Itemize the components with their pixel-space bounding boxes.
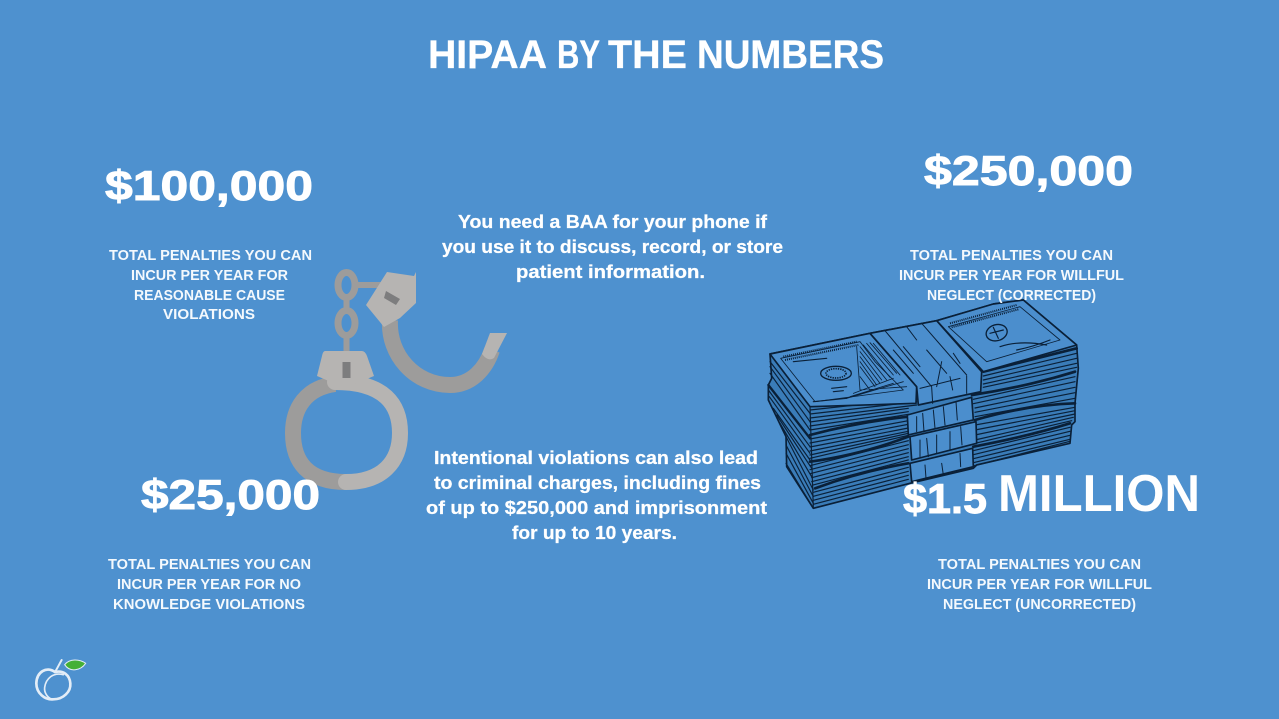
text block: BAA note: [442, 212, 783, 282]
lower bands: [907, 397, 973, 435]
top notes: [770, 333, 917, 407]
stat: $100,000: REASONABLE CAUSE: [134, 288, 285, 304]
stat: $1.5 million: MILLION: [998, 465, 1200, 523]
stat: $100,000: INCUR PER YEAR FOR: [131, 268, 289, 284]
text block: BAA note: patient information.: [516, 262, 705, 282]
stat: $250,000: INCUR PER YEAR FOR WILLFUL: [899, 268, 1124, 284]
stat: $250,000: TOTAL PENALTIES YOU CAN: [910, 248, 1113, 264]
stat: $100,000: [105, 162, 313, 323]
stat: $100,000: $100,000: [105, 162, 313, 209]
stat: $1.5 million: INCUR PER YEAR FOR WILLFUL: [927, 577, 1152, 593]
silhouette: [768, 300, 1078, 508]
title: NUMBERS: [697, 33, 884, 77]
stat: $25,000: $25,000: [141, 471, 320, 518]
title: THE: [608, 33, 687, 77]
stat: $25,000: INCUR PER YEAR FOR NO: [117, 577, 301, 593]
stat: $1.5 million: NEGLECT (UNCORRECTED): [943, 597, 1136, 613]
icon: stack of cash: [768, 300, 1078, 508]
open cuff tip: [482, 333, 507, 359]
stat: $1.5 million: TOTAL PENALTIES YOU CAN: [938, 557, 1141, 573]
icon: peach logo: [36, 660, 86, 699]
title: BY: [557, 33, 600, 77]
stat: $25,000: TOTAL PENALTIES YOU CAN: [108, 557, 311, 573]
stat: $250,000: $250,000: [924, 147, 1133, 194]
left corner edges: [768, 362, 813, 508]
open cuff arc: [390, 320, 492, 385]
title: [428, 33, 884, 77]
stat: $100,000: TOTAL PENALTIES YOU CAN: [109, 248, 312, 264]
left face page edges: [810, 398, 917, 504]
stat: $250,000: NEGLECT (CORRECTED): [927, 288, 1096, 304]
stat: $25,000: [108, 471, 320, 613]
stat: $25,000: KNOWLEDGE VIOLATIONS: [113, 597, 305, 613]
open cuff lock: [366, 272, 416, 327]
text block: criminal charges note: Intentional violations can also lead: [434, 448, 758, 468]
text block: BAA note: You need a BAA for your phone if: [458, 212, 768, 232]
stat: $250,000: [899, 147, 1133, 304]
text block: BAA note: you use it to discuss, record, or store: [442, 237, 783, 257]
text block: criminal charges note: [426, 448, 767, 543]
centre band: [870, 321, 982, 405]
chain links: [338, 272, 382, 352]
text block: criminal charges note: of up to $250,000 and imprisonment: [426, 498, 767, 518]
right face page edges: [973, 353, 1077, 466]
stat: $1.5 million: [903, 465, 1200, 613]
stat: $1.5 million: $1.5: [903, 475, 987, 522]
text block: criminal charges note: for up to 10 years.: [512, 523, 677, 543]
lower cuff ring: [293, 382, 400, 482]
title: HIPAA: [428, 33, 547, 77]
icon: handcuffs: [293, 272, 507, 482]
text block: criminal charges note: to criminal charges, including fines: [434, 473, 761, 493]
lower cuff lock: [317, 351, 374, 388]
stat: $100,000: VIOLATIONS: [163, 307, 255, 323]
